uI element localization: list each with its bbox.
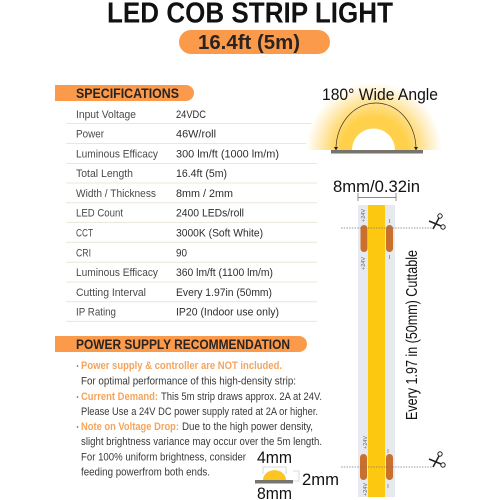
spec row: luminous efficacy 2: 360 lm/ft (1100 lm/m) [176, 267, 273, 279]
spec row: power: Power [76, 128, 104, 140]
spec row: cct [76, 228, 263, 240]
spec row: luminous efficacy: 300 lm/ft (1000 lm/m) [176, 148, 279, 160]
power supply note text: Power supply & controller are NOT included. [81, 360, 282, 372]
strip polarity marks: +24V [361, 209, 367, 222]
power supply heading: POWER SUPPLY RECOMMENDATION [76, 337, 290, 352]
spec row: cutting interval: Cutting Interval [76, 287, 146, 299]
spec row: led count [76, 208, 244, 220]
icon: top scissors [429, 214, 445, 229]
cross-section dimension diagram [255, 448, 339, 500]
spec row: cutting interval [76, 287, 272, 299]
spec row: led count: 2400 LEDs/roll [176, 208, 244, 220]
power supply note text: slight brightness variance may occur over the 5m length. [81, 436, 322, 448]
beam angle diagram [306, 82, 442, 154]
spec row: led count: LED Count [76, 208, 123, 220]
spec row: total length: Total Length [76, 168, 133, 180]
spec row: luminous efficacy 2: Luminous Efficacy [76, 267, 159, 279]
spec row: luminous efficacy: Luminous Efficacy [76, 148, 159, 160]
spec row: power [76, 128, 216, 140]
length pill: 16.4ft (5m) [198, 32, 300, 54]
strip polarity marks [361, 209, 390, 496]
top cut line [341, 227, 432, 229]
width label: 8mm/0.32in [333, 177, 420, 196]
icon: bottom scissors [429, 452, 445, 467]
power supply note text: For 100% uniform brightness, consider [81, 452, 246, 464]
power supply note text: For optimal performance of this high-density strip: [81, 376, 296, 388]
spec row: cct: 3000K (Soft White) [176, 228, 263, 240]
spec row: ip rating [76, 306, 279, 318]
spec row: cct: CCT [76, 228, 93, 240]
spec row: ip rating: IP20 (Indoor use only) [176, 306, 279, 318]
spec row: cri: CRI [76, 248, 91, 260]
power supply note text: Note on Voltage Drop: [81, 421, 179, 433]
power supply note text [77, 360, 322, 478]
power supply note text: Due to the high power density, [182, 421, 313, 433]
spec row: cri [76, 248, 187, 260]
base [331, 150, 423, 154]
panel: power supply recommendation [55, 336, 322, 478]
bottom solder pads [360, 454, 393, 480]
spec row: cri: 90 [176, 248, 187, 260]
spec row: total length [76, 168, 227, 180]
strip polarity marks: +24V [361, 257, 367, 270]
cross-section dimension diagram: 2mm [302, 470, 339, 489]
spec row: input voltage [76, 109, 206, 121]
strip polarity marks: +24V [363, 436, 369, 449]
spec row: luminous efficacy [76, 148, 279, 160]
spec row: ip rating: IP Rating [76, 306, 116, 318]
light glow [306, 82, 442, 150]
spec row: input voltage: 24VDC [176, 109, 206, 121]
spec row: power: 46W/roll [176, 128, 216, 140]
power supply note text: Please Use a 24V DC power supply rated at 2A or higher. [81, 406, 318, 418]
white core [352, 128, 395, 150]
strip polarity marks: +24V [363, 483, 369, 496]
specifications heading: SPECIFICATIONS [76, 86, 179, 101]
angle label: 180° Wide Angle [322, 85, 438, 104]
spec row: cutting interval: Every 1.97in (50mm) [176, 287, 272, 299]
spec row: luminous efficacy 2 [76, 267, 273, 279]
cutting interval vertical label: Every 1.97 in (50mm) Cuttable [404, 250, 421, 420]
spec row: width thickness: 8mm / 2mm [176, 188, 233, 200]
spec row: width thickness: Width / Thickness [76, 188, 156, 200]
LED strip [358, 205, 395, 497]
power supply note text: Current Demand: [81, 391, 158, 403]
spec row: width thickness [76, 188, 233, 200]
angle arc [336, 103, 416, 149]
cross-section dimension diagram: 4mm [257, 448, 292, 467]
length pill [179, 30, 330, 54]
spec row: input voltage: Input Voltage [76, 109, 136, 121]
power supply note text: This 5m strip draws approx. 2A at 24V. [161, 391, 322, 403]
spec row: total length: 16.4ft (5m) [176, 168, 227, 180]
bottom cut line [341, 466, 432, 468]
power supply note text: feeding powerfrom both ends. [81, 466, 210, 478]
panel: specifications [55, 85, 317, 321]
top solder pads [360, 225, 393, 252]
